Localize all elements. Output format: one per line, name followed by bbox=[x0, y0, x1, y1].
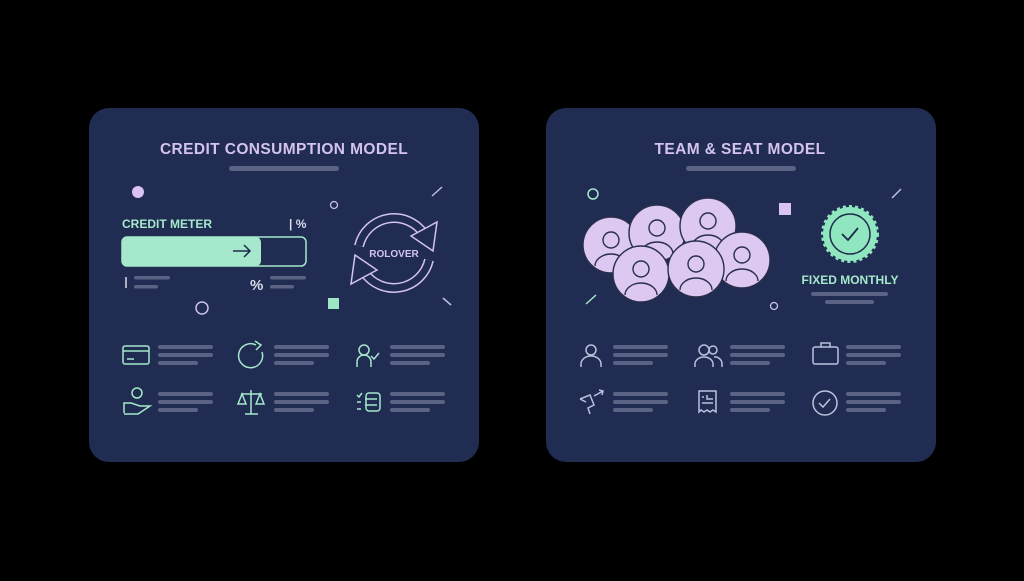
icon: refresh bbox=[239, 341, 263, 368]
icon grid: credit features bbox=[123, 341, 380, 414]
panel: team & seat model bbox=[546, 108, 936, 462]
icon: share bbox=[580, 390, 603, 414]
icon: rollover cycle: ROLOVER bbox=[369, 249, 420, 260]
icon: card bbox=[123, 346, 149, 364]
icon: check circle bbox=[813, 391, 837, 415]
avatar group bbox=[583, 198, 770, 302]
icon grid: team features bbox=[580, 343, 838, 415]
credit meter bbox=[122, 217, 307, 294]
badge: fixed monthly: FIXED MONTHLY bbox=[802, 273, 898, 287]
icon: checklist bbox=[357, 393, 380, 411]
icon: user bbox=[581, 345, 601, 367]
credit meter: | % bbox=[289, 217, 307, 231]
title: credit consumption model: CREDIT CONSUMPTION MODEL bbox=[160, 141, 408, 158]
icon: scales bbox=[238, 390, 264, 414]
panel: credit consumption model bbox=[89, 108, 479, 462]
title: team & seat model: TEAM & SEAT MODEL bbox=[655, 141, 825, 158]
icon: briefcase bbox=[813, 343, 838, 364]
credit meter: CREDIT METER bbox=[122, 217, 212, 231]
icon: users bbox=[695, 345, 722, 367]
icon: dollar hand bbox=[124, 388, 150, 414]
badge: fixed monthly bbox=[802, 207, 898, 304]
icon: user check bbox=[357, 345, 379, 367]
credit meter: % bbox=[250, 277, 263, 294]
icon: receipt bbox=[699, 391, 716, 412]
icon: rollover cycle bbox=[351, 218, 437, 288]
